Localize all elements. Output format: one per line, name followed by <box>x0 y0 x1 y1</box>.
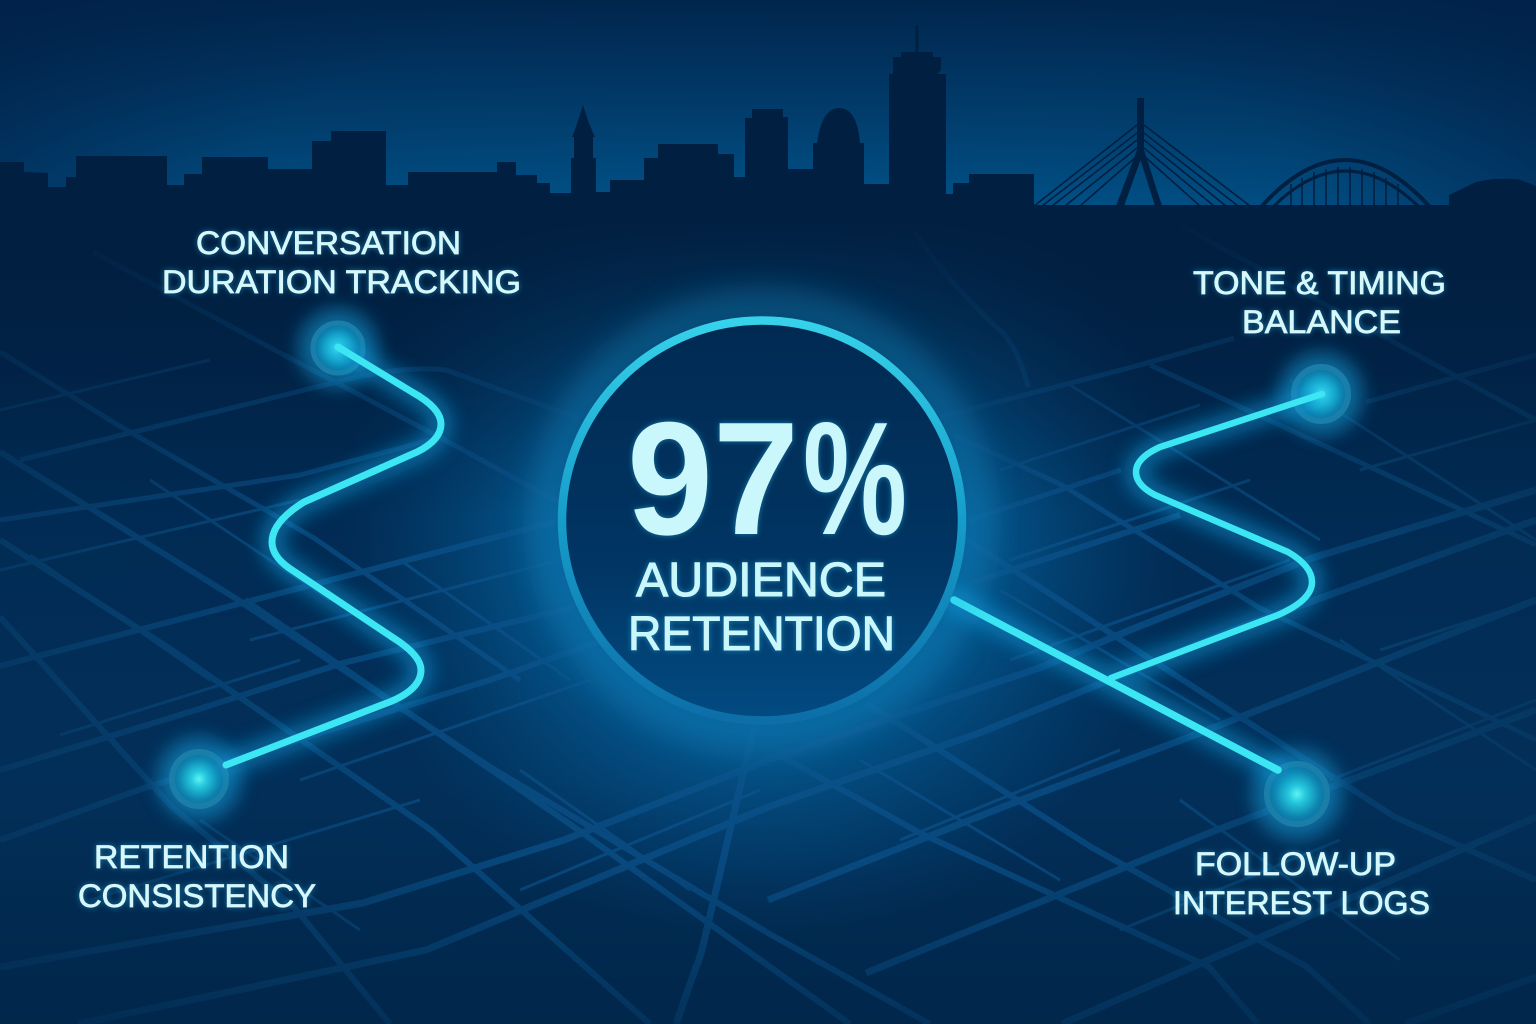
label: conversation duration tracking <box>162 225 521 300</box>
label: tone and timing balance <box>1193 265 1446 340</box>
label: follow-up interest logs: FOLLOW-UP <box>1195 846 1396 882</box>
label: retention consistency: CONSISTENCY <box>78 878 316 914</box>
label: conversation duration tracking: CONVERSATION <box>196 225 461 261</box>
stat value: 97 <box>627 389 799 569</box>
stat caption: AUDIENCE <box>636 554 886 607</box>
label: retention consistency <box>78 839 316 914</box>
city skyline silhouette <box>0 25 1536 225</box>
right route line <box>954 394 1322 770</box>
label: tone and timing balance: TONE & TIMING <box>1193 265 1446 301</box>
icon: arch bridge <box>1262 160 1429 206</box>
street map ground <box>0 205 1536 1024</box>
node: conversation duration tracking <box>298 308 378 388</box>
label: follow-up interest logs <box>1173 846 1430 921</box>
icon: cable-stayed bridge <box>1034 98 1250 206</box>
left route line <box>226 347 441 765</box>
stat caption: RETENTION <box>628 608 895 661</box>
node: retention consistency <box>157 737 241 821</box>
label: retention consistency: RETENTION <box>94 839 289 875</box>
stat caption <box>628 554 895 661</box>
stat value <box>627 389 907 569</box>
node: tone and timing balance <box>1279 352 1363 436</box>
label: follow-up interest logs: INTEREST LOGS <box>1173 885 1430 921</box>
central stat circle <box>550 308 974 732</box>
node: follow-up interest logs <box>1252 749 1342 839</box>
sky background <box>0 0 1536 215</box>
label: tone and timing balance: BALANCE <box>1242 304 1401 340</box>
label: conversation duration tracking: DURATION TRACKING <box>162 264 521 300</box>
stat value: % <box>803 389 907 569</box>
